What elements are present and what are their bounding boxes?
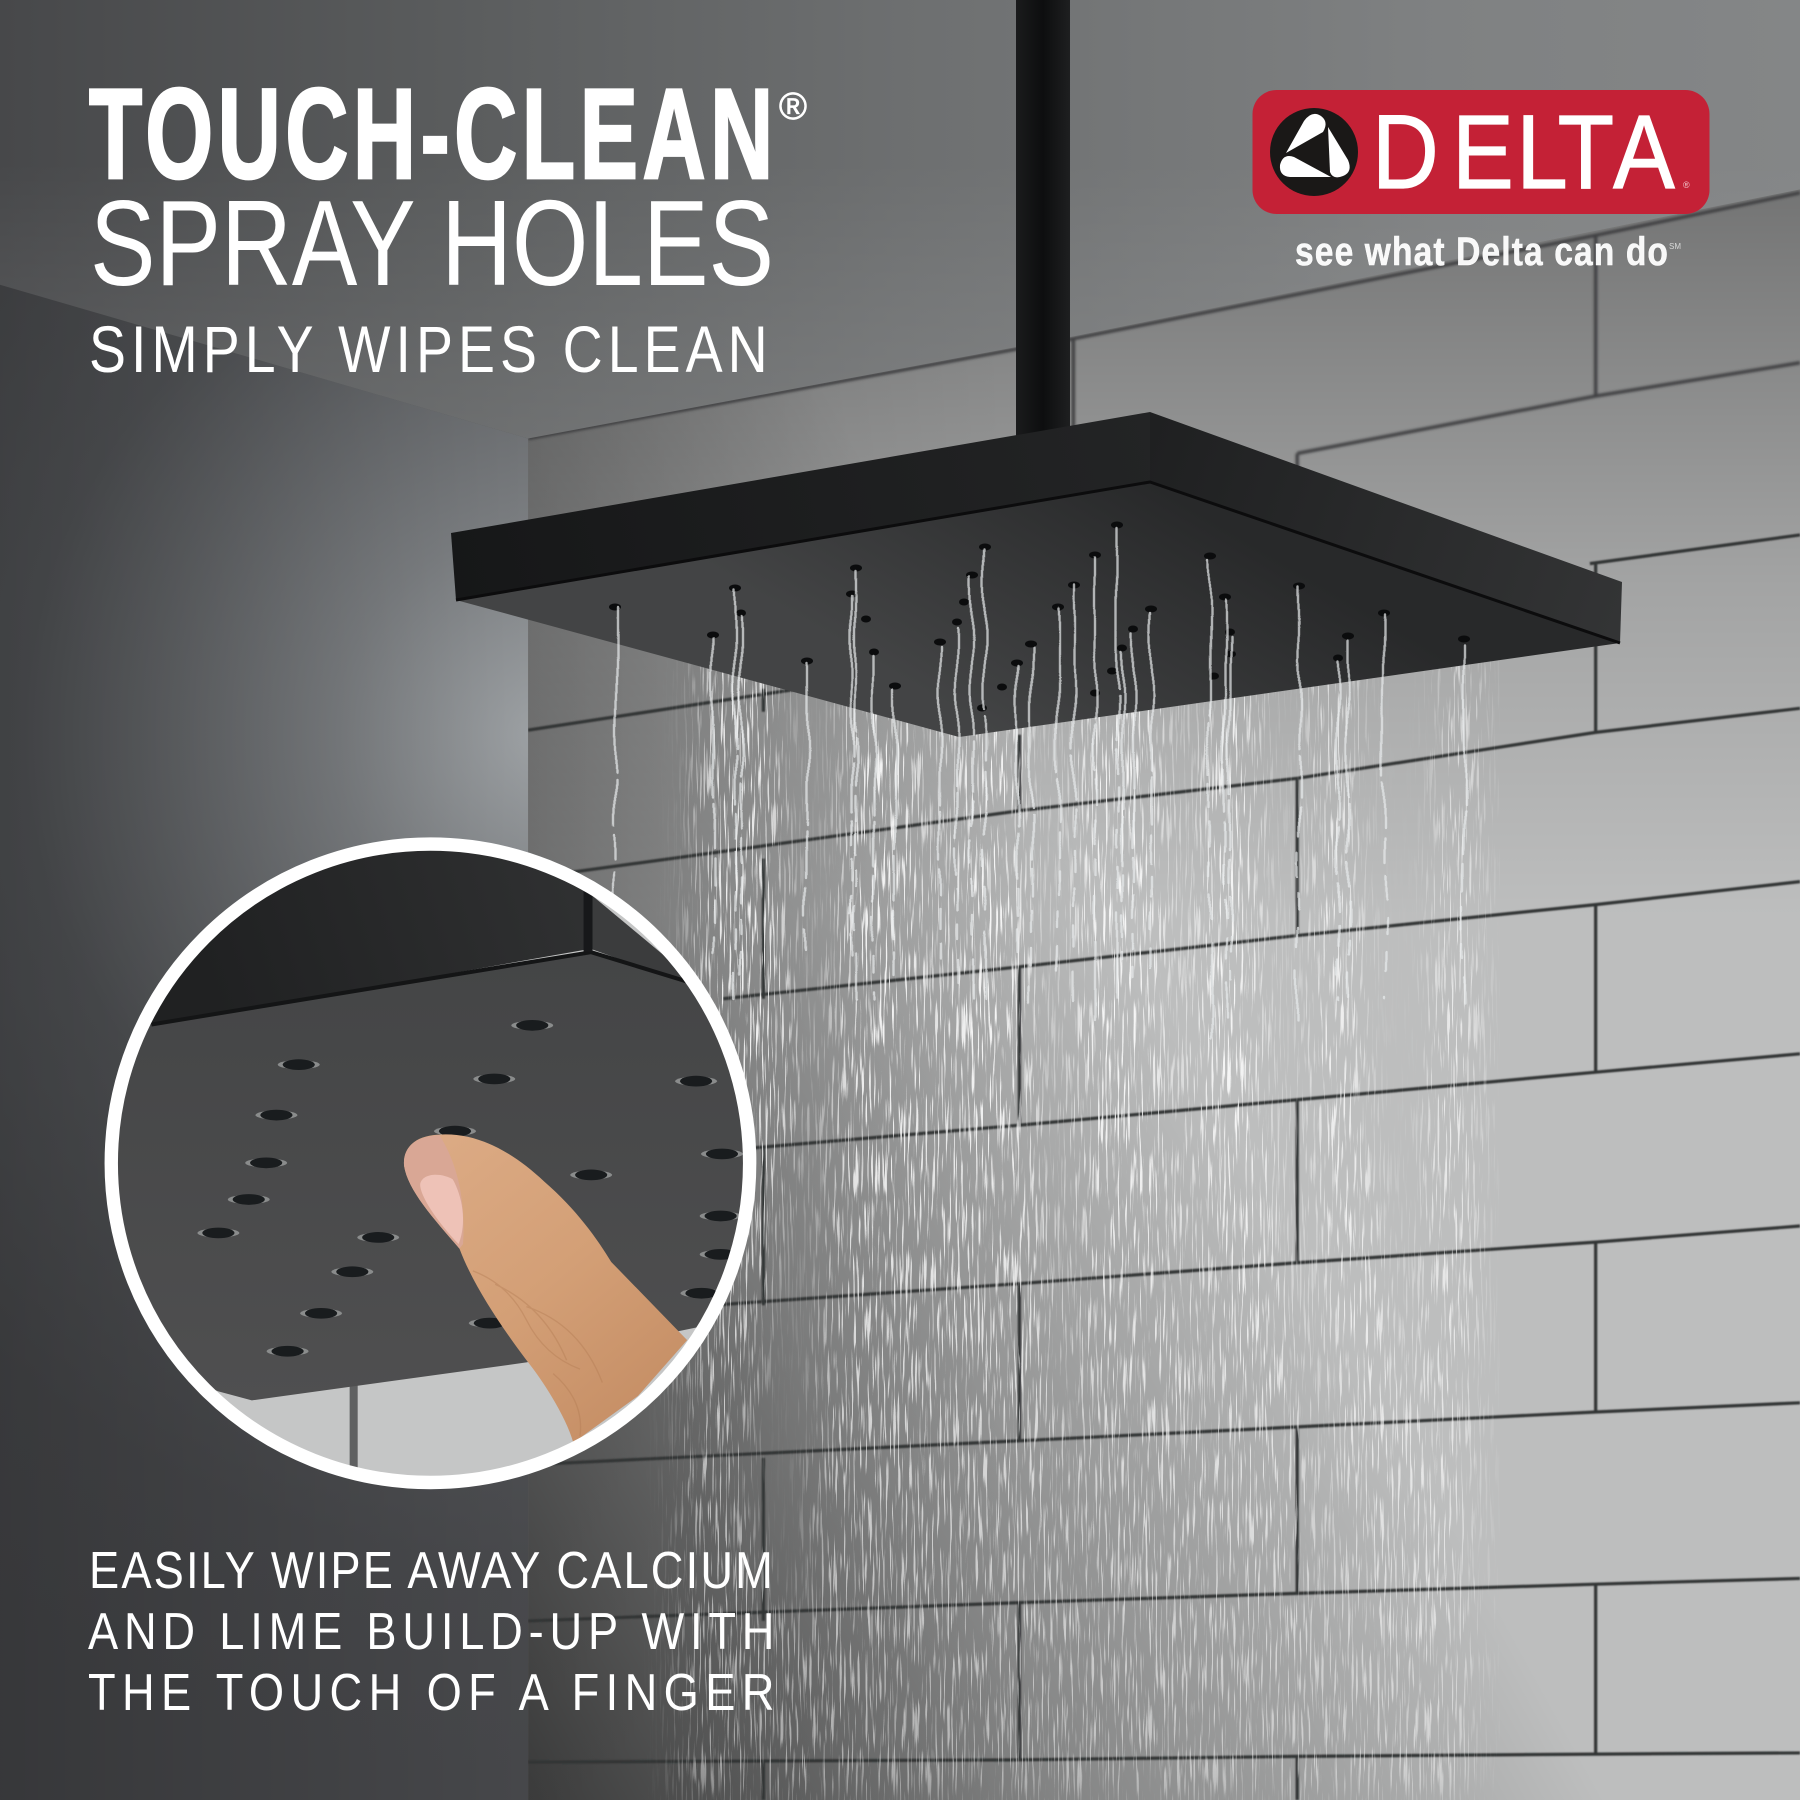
fingertip skin [404, 1135, 464, 1249]
front left face [451, 412, 1150, 600]
ceiling [0, 0, 1800, 439]
wall shading [528, 115, 1800, 1800]
icon: delta triangle mark [1270, 108, 1358, 196]
shower head [451, 412, 1622, 737]
registered mark: ® [779, 86, 807, 128]
title line: Spray Holes: SPRAY HOLES [90, 175, 774, 311]
tagline: see what Delta can do [1295, 229, 1668, 274]
head side face [150, 850, 584, 1025]
head underside [107, 954, 776, 1400]
callout: detail circle with finger [104, 837, 756, 1490]
body text: THE TOUCH OF A FINGER [88, 1664, 774, 1722]
fingernail [420, 1175, 463, 1244]
body text [88, 1542, 774, 1722]
water streams from spray holes [615, 528, 1464, 1040]
body text: EASILY WIPE AWAY CALCIUM [89, 1542, 773, 1600]
red badge [1252, 90, 1710, 214]
grout lines upper [528, 193, 1800, 471]
wall tile base [528, 115, 1800, 1800]
left side wall [0, 285, 528, 1800]
title [89, 63, 807, 311]
tile behind [216, 896, 696, 1476]
finger [404, 1134, 687, 1443]
ceiling pipe [1016, 0, 1070, 440]
edge highlights [456, 482, 1620, 643]
front right face [1150, 412, 1622, 643]
title line: Touch-Clean: TOUCH-CLEAN [89, 63, 773, 206]
white ring [111, 844, 750, 1483]
logo: Delta [1252, 90, 1710, 214]
spray holes [609, 522, 1470, 712]
wordmark: DELTA [1372, 92, 1675, 210]
underside of head [456, 482, 1620, 737]
tagline: SM [1669, 242, 1681, 251]
body text: AND LIME BUILD-UP WITH [88, 1603, 774, 1661]
water droplet texture [600, 640, 1500, 1800]
registered mark small: ® [1683, 180, 1690, 190]
subtitle: SIMPLY WIPES CLEAN [89, 312, 768, 386]
grout lines lower [528, 535, 1800, 1800]
skin creases [473, 1271, 602, 1436]
spray holes [197, 1020, 743, 1357]
